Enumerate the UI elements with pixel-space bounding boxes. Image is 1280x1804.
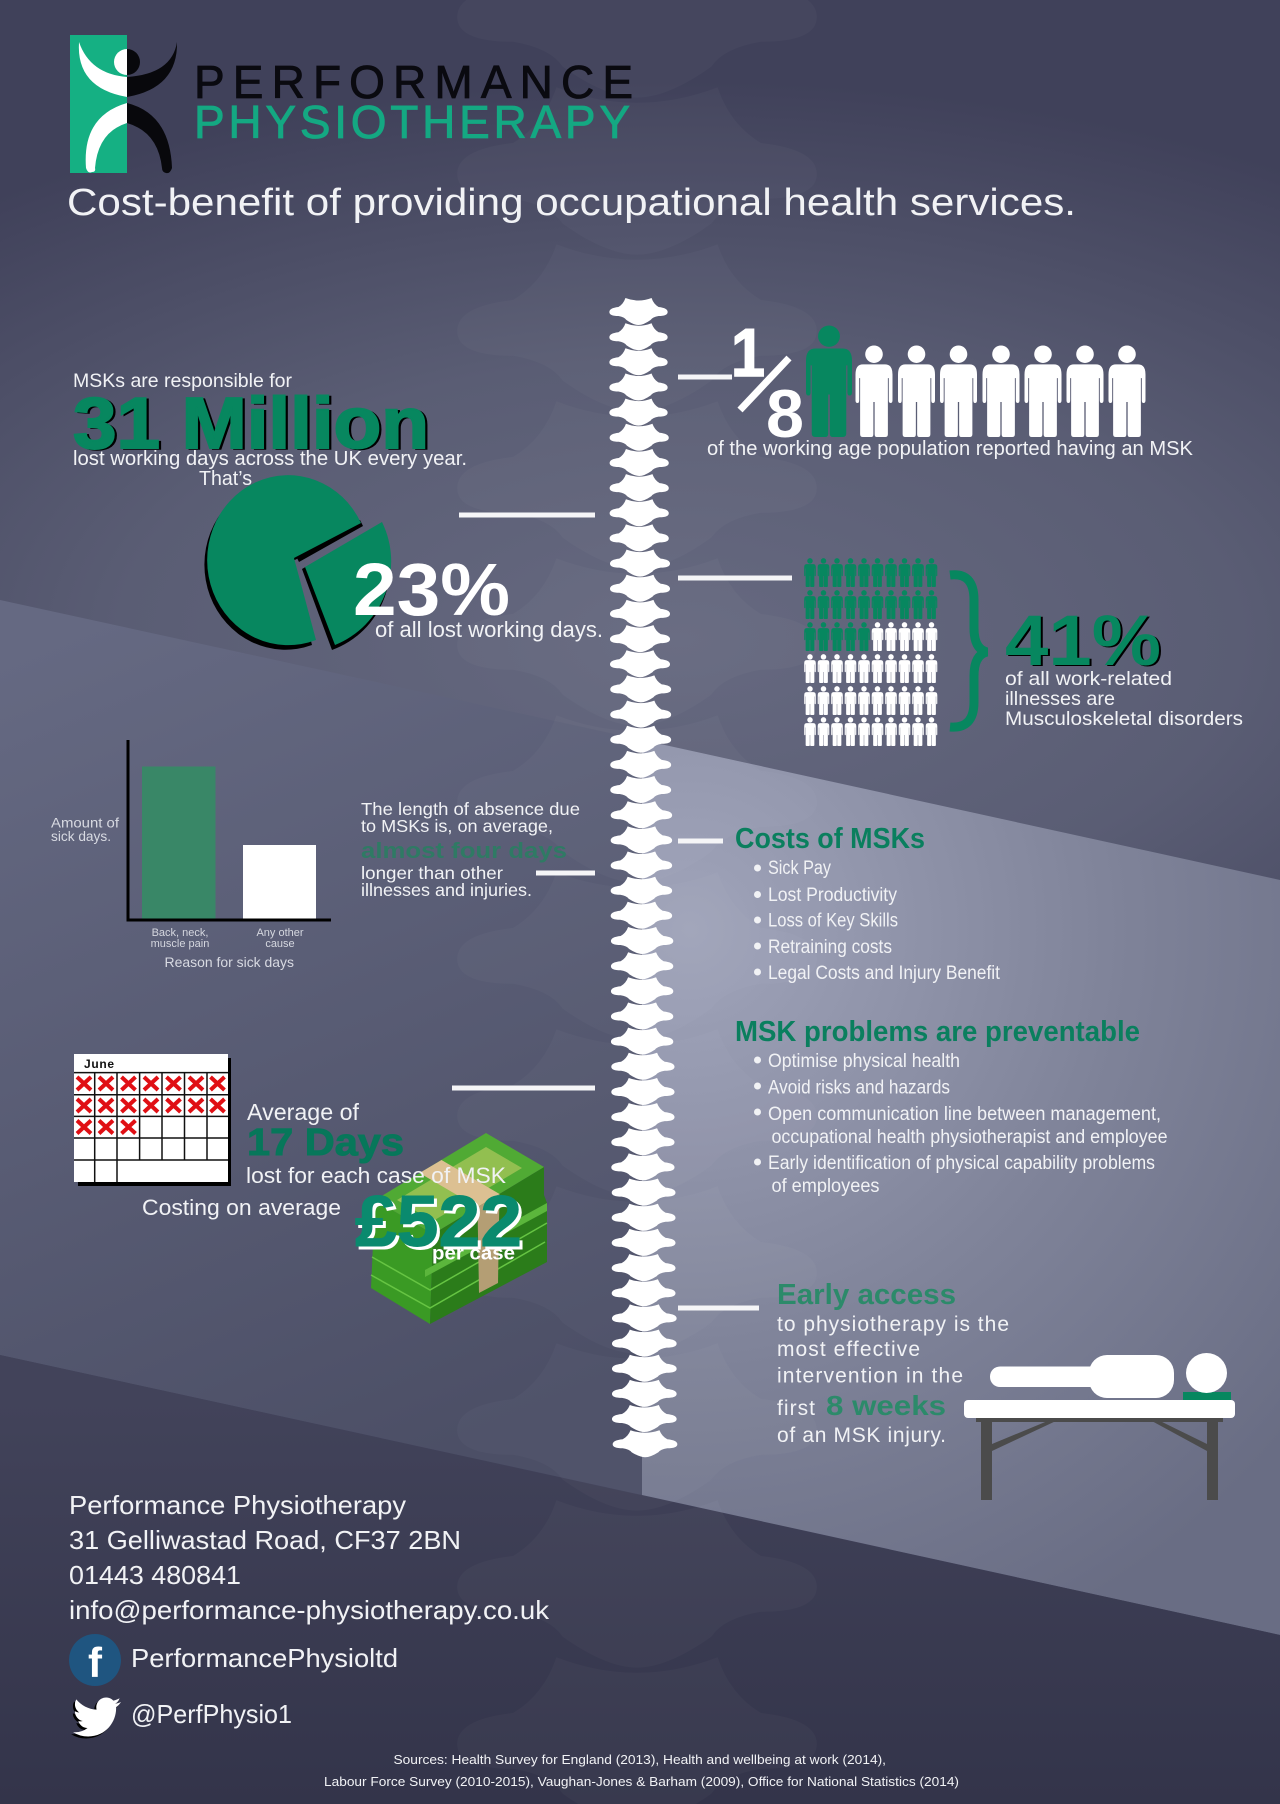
- bullet list: Early identification of physical capability problems: [768, 1153, 1155, 1174]
- side layers: [371, 1223, 547, 1308]
- fraction: 1/8: [731, 315, 804, 452]
- bed top: [964, 1400, 1235, 1418]
- twitter row: [71, 1697, 292, 1739]
- bullet list: Open communication line between management,: [768, 1104, 1161, 1125]
- red crosses: [77, 1077, 224, 1134]
- patient body: [990, 1366, 1100, 1387]
- icon: facebook: [69, 1634, 121, 1686]
- bullet list: Loss of Key Skills: [768, 910, 898, 932]
- logo: Performance Physiotherapy: [70, 35, 633, 173]
- connector lines from spine: [452, 374, 792, 1310]
- faint background spine: [457, 0, 817, 1804]
- bed frame: [976, 1417, 1223, 1500]
- stat: 31 Million: 31 Million: [73, 384, 429, 464]
- icon: green person: [806, 326, 852, 437]
- stat: 522 pounds per case: £522: [358, 1185, 525, 1265]
- x axis title: Reason for sick days: [164, 954, 294, 970]
- panel: 41 percent pictogram: [804, 558, 1243, 746]
- icon: twitter bird: [71, 1697, 121, 1739]
- chart axes: [128, 740, 331, 920]
- x axis category labels: Any other: [256, 927, 304, 939]
- icon: patient on treatment bed: [964, 1353, 1235, 1500]
- panel: costs of MSKs: [735, 823, 1001, 984]
- spine: [609, 298, 677, 1457]
- icon: logo figure: [70, 35, 177, 173]
- panel: 31 million lost working days: [73, 370, 467, 490]
- bullet list: Legal Costs and Injury Benefit: [768, 963, 1001, 984]
- highlight: almost four days: almost four days: [361, 838, 567, 863]
- bullet list: [754, 858, 1001, 984]
- heading: Costs of MSKs: [735, 823, 925, 855]
- bar: any other cause: [243, 845, 316, 918]
- stat: 31 Million: 31 Million: [76, 385, 432, 465]
- text: twitter handle: @PerfPhysio1: [131, 1699, 292, 1729]
- contact details: info@performance-physiotherapy.co.uk: [69, 1595, 550, 1625]
- stat: 522 pounds per case: £522: [355, 1182, 522, 1262]
- bar: back, neck, muscle pain: [142, 766, 216, 918]
- panel: early access: first: [777, 1397, 815, 1420]
- bullet list: occupational health physiotherapist and employee: [772, 1127, 1168, 1148]
- y axis label: sick days.: [51, 829, 111, 844]
- heading: Early access: [777, 1279, 956, 1311]
- stat: 41%: 41%: [1005, 602, 1161, 681]
- icons: grid of sixty people: [804, 558, 937, 746]
- icon: facebook: f: [88, 1639, 103, 1686]
- text block: 17 days average: Average of: [247, 1099, 360, 1125]
- text block: 17 days average: lost for each case of MSK: [246, 1163, 506, 1188]
- stat: 41%: 41%: [1007, 603, 1163, 682]
- patient head: [1186, 1353, 1227, 1393]
- text block: length of absence: The length of absence due: [361, 799, 580, 819]
- y axis label: Amount of: [51, 816, 119, 830]
- stat: 23%: 23%: [353, 548, 510, 631]
- contact details: 01443 480841: [69, 1560, 241, 1590]
- text: of all lost working days: of all lost working days.: [375, 617, 603, 642]
- fraction: 1/8: 8: [766, 376, 804, 452]
- facebook row: [69, 1634, 398, 1686]
- contact details: 31 Gelliwastad Road, CF37 2BN: [69, 1525, 461, 1555]
- icon: curly brace: [950, 575, 987, 727]
- bullet list: of employees: [772, 1176, 880, 1197]
- bullet list: Lost Productivity: [768, 885, 897, 906]
- text: lost working days: lost working days across the UK every year.: [73, 447, 467, 470]
- text: MSKs are responsible for: MSKs are responsible for: [73, 370, 292, 392]
- text: of the working age population: of the working age population reported having an MSK: [707, 438, 1194, 460]
- bullet list: Retraining costs: [768, 937, 892, 958]
- text: of all work-related illnesses: [1005, 668, 1243, 730]
- icon: calendar June: [74, 1054, 231, 1186]
- text: of all work-related illnesses: illnesses are: [1005, 688, 1115, 710]
- panel: early access: [777, 1279, 1009, 1447]
- bar chart: amount of sick days: [51, 740, 331, 970]
- bullet list: Optimise physical health: [768, 1051, 960, 1072]
- icon: calendar June: June: [84, 1057, 114, 1071]
- logo wordmark: physiotherapy: PHYSIOTHERAPY: [194, 96, 630, 148]
- paper band: [420, 1160, 500, 1207]
- x axis category labels: cause: [265, 938, 295, 950]
- panel: early access: intervention in the: [777, 1364, 963, 1388]
- bullet list: [754, 1051, 1168, 1197]
- text block: length of absence: illnesses and injuries.: [361, 880, 532, 900]
- text block: length of absence: to MSKs is, on average,: [361, 816, 553, 836]
- sources: Labour Force Survey (2010-2015), Vaughan-Jones & Barham (2009), Office for National Statistics (2014): [324, 1774, 959, 1789]
- fraction: 1/8: 1: [731, 315, 765, 391]
- text block: length of absence: longer than other: [361, 863, 503, 883]
- text block: length of absence: [361, 799, 580, 900]
- top face: [375, 1133, 544, 1234]
- pillow: [1183, 1392, 1231, 1400]
- sources: [324, 1752, 959, 1789]
- text: per case: per case: [432, 1244, 515, 1264]
- pie chart: 23 percent: [204, 475, 391, 650]
- icon: stack of banknotes: [371, 1133, 547, 1324]
- sources: Sources: Health Survey for England (2013), Health and wellbeing at work (2014),: [394, 1752, 886, 1767]
- icons: seven white people: [856, 345, 1146, 437]
- y axis label: [51, 816, 119, 844]
- panel: early access: to physiotherapy is the: [777, 1313, 1009, 1336]
- stat: 17 Days: 17 Days: [247, 1122, 404, 1164]
- contact details: [69, 1490, 550, 1625]
- x axis category labels: [151, 927, 304, 950]
- x axis category labels: Back, neck,: [152, 927, 208, 939]
- bullet list: Avoid risks and hazards: [768, 1078, 950, 1098]
- logo wordmark: performance: PERFORMANCE: [194, 56, 633, 108]
- panel: MSK problems are preventable: [735, 1016, 1168, 1197]
- text block: 17 days average: [142, 1099, 506, 1220]
- contact details: Performance Physiotherapy: [69, 1490, 406, 1520]
- title: Cost-benefit of providing occupational health services.: [67, 182, 1076, 224]
- heading: MSK problems are preventable: [735, 1016, 1140, 1048]
- stack sides: [371, 1200, 433, 1324]
- highlight: 8 weeks: 8 weeks: [826, 1390, 946, 1421]
- x axis category labels: muscle pain: [151, 938, 209, 950]
- text: of all work-related illnesses: of all work-related: [1005, 668, 1172, 690]
- panel: one in eight pictogram: [707, 315, 1194, 460]
- panel: early access: most effective: [777, 1338, 920, 1361]
- text: That's: That’s: [199, 467, 252, 490]
- bullet list: Sick Pay: [768, 858, 831, 879]
- text block: 17 days average: Costing on average: [142, 1195, 341, 1220]
- lower bundle lip: [425, 1203, 547, 1277]
- text: facebook handle: PerformancePhysioltd: [131, 1643, 398, 1673]
- panel: early access: of an MSK injury.: [777, 1424, 946, 1447]
- text: of all work-related illnesses: Musculoskeletal disorders: [1005, 708, 1243, 730]
- stat: 23%: [353, 548, 603, 642]
